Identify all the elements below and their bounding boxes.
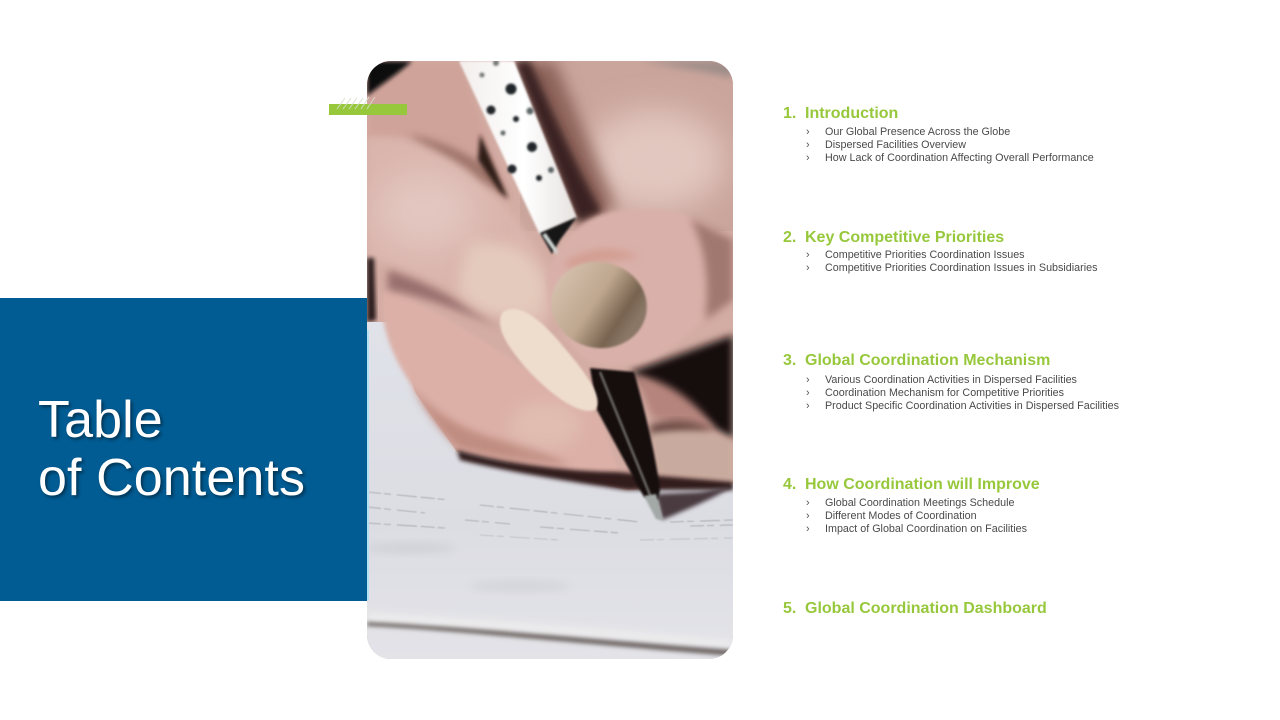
section 4 list: Different Modes of Coordination	[825, 510, 977, 522]
section 4 list: Impact of Global Coordination on Facilities	[825, 523, 1027, 535]
joint highlight	[470, 245, 545, 317]
finger nail	[500, 309, 598, 411]
section 2 heading: 2.	[783, 229, 796, 246]
title: of Contents	[38, 449, 305, 507]
accent: green bar with hatch marks	[329, 96, 407, 115]
section 2	[783, 229, 1098, 274]
title	[38, 391, 307, 507]
section 5 heading: Global Coordination Dashboard	[805, 600, 1047, 617]
section 1 list: How Lack of Coordination Affecting Overall Performance	[825, 152, 1094, 164]
section 1 list: Our Global Presence Across the Globe	[825, 126, 1010, 138]
section 3 list: Coordination Mechanism for Competitive Priorities	[825, 387, 1064, 399]
finger crease	[408, 135, 508, 198]
section 4 list	[806, 497, 1027, 535]
thumb nail	[552, 262, 648, 350]
section 1 heading: Introduction	[805, 105, 898, 122]
section 4	[783, 476, 1040, 535]
shadow left of the pen	[478, 134, 508, 199]
section 3 heading: 3.	[783, 352, 796, 369]
section 3 list: Product Specific Coordination Activities in Dispersed Facilities	[825, 400, 1119, 412]
section 1 heading: 1.	[783, 105, 796, 122]
gap between fingers	[388, 270, 500, 328]
pen barrel	[459, 60, 577, 254]
lower right dark background	[630, 335, 733, 480]
section 2 list: Competitive Priorities Coordination Issues in Subsidiaries	[825, 262, 1097, 274]
section 2 heading: Key Competitive Priorities	[805, 229, 1004, 246]
photo: hand writing with a pen	[367, 61, 733, 659]
section 2 list	[806, 249, 1098, 274]
section 1 list	[806, 126, 1094, 164]
photo base skin	[367, 61, 733, 659]
index finger	[370, 138, 532, 288]
upper right palm	[520, 61, 733, 231]
paper	[365, 322, 733, 659]
section 3 list: Various Coordination Activities in Dispersed Facilities	[825, 374, 1077, 386]
lower finger	[382, 290, 620, 474]
upper left hand	[367, 61, 481, 154]
section 4 heading: 4.	[783, 476, 796, 493]
knuckle highlight	[470, 246, 530, 318]
black corner	[367, 61, 412, 96]
left dark gap	[367, 258, 376, 322]
thumb	[554, 210, 700, 362]
section 5	[783, 600, 1047, 617]
section 3 list	[806, 374, 1119, 412]
section 2 list: Competitive Priorities Coordination Issues	[825, 249, 1025, 261]
section 1 list: Dispersed Facilities Overview	[825, 139, 966, 151]
section 3 heading: Global Coordination Mechanism	[805, 352, 1050, 369]
shadow right of the pen	[520, 61, 615, 225]
section 3	[783, 352, 1119, 412]
hand shadow on paper	[457, 450, 733, 490]
section 4 list: Global Coordination Meetings Schedule	[825, 497, 1014, 509]
section 5 heading: 5.	[783, 600, 796, 617]
panel: blue title block	[0, 298, 367, 601]
section 1	[783, 105, 1094, 164]
title: Table	[38, 391, 163, 449]
section 4 heading: How Coordination will Improve	[805, 476, 1040, 493]
left edge tint	[367, 330, 369, 600]
lower pen	[590, 368, 663, 520]
pen shadow	[656, 486, 733, 520]
